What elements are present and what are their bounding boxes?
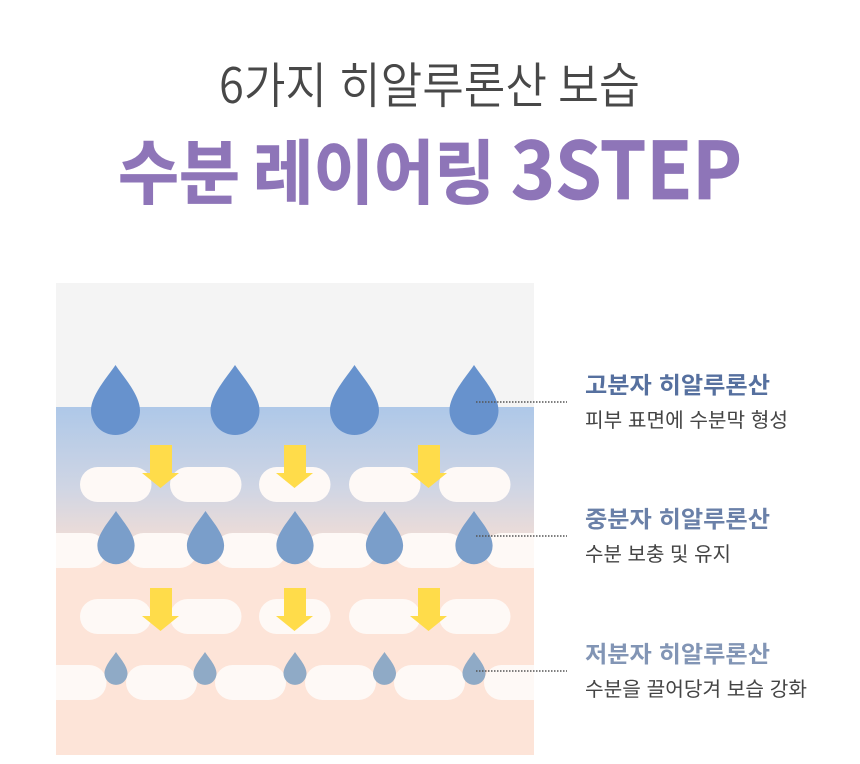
arrows: first penetration row bbox=[142, 445, 447, 488]
icons: low molecular water drops bbox=[104, 652, 486, 685]
title: 6가지 히알루론산 보습: 보습 bbox=[558, 47, 640, 118]
heading: 수분 레이어링 3STEP: 3STEP bbox=[511, 107, 742, 222]
icons: high molecular water drops bbox=[91, 365, 498, 435]
skin cells row 2 bbox=[56, 533, 534, 568]
label: medium molecular hyaluronic acid bbox=[585, 500, 770, 567]
label heading: 저분자 히알루론산 bbox=[585, 635, 770, 669]
skin cells row 3 bbox=[80, 599, 510, 634]
gradient skin layer bbox=[56, 407, 534, 568]
panel: skin layer diagram bbox=[56, 283, 534, 755]
label description: 수분 보충 및 유지 bbox=[585, 538, 731, 567]
label heading: 중분자 히알루론산 bbox=[585, 500, 770, 534]
skin cells row 4 bbox=[56, 665, 534, 700]
air layer background bbox=[56, 283, 534, 407]
label: high molecular hyaluronic acid bbox=[585, 366, 788, 433]
label description: 수분을 끌어당겨 보습 강화 bbox=[585, 673, 807, 702]
arrows: second penetration row bbox=[142, 588, 447, 631]
label: low molecular hyaluronic acid bbox=[585, 635, 807, 702]
title: 6가지 히알루론산 보습: 히알루론산 bbox=[339, 47, 547, 118]
label heading: 고분자 히알루론산 bbox=[585, 366, 770, 400]
deep skin layer bbox=[56, 568, 534, 755]
label description: 피부 표면에 수분막 형성 bbox=[585, 404, 788, 433]
title: 6가지 히알루론산 보습 bbox=[219, 47, 640, 118]
leader line: medium molecular bbox=[476, 535, 567, 537]
heading: 수분 레이어링 3STEP bbox=[118, 107, 742, 222]
skin cells row 1 bbox=[80, 467, 510, 502]
icons: medium molecular water drops bbox=[97, 511, 493, 564]
title: 6가지 히알루론산 보습: 6가지 bbox=[219, 47, 327, 118]
leader line: low molecular bbox=[476, 670, 567, 672]
leader line: high molecular bbox=[476, 401, 567, 403]
heading: 수분 레이어링 3STEP: 수분 bbox=[118, 118, 240, 219]
heading: 수분 레이어링 3STEP: 레이어링 bbox=[253, 118, 495, 219]
